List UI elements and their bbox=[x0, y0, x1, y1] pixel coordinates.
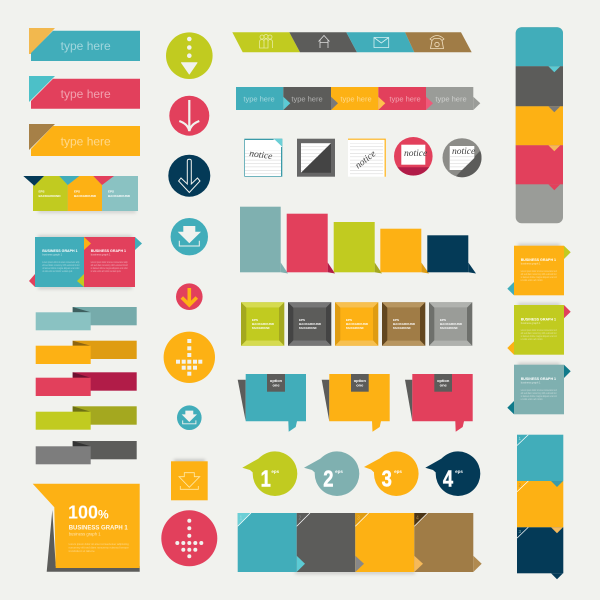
card text bbox=[521, 318, 557, 341]
panel: green business card bbox=[507, 303, 571, 355]
notice orange note: notice bbox=[354, 149, 378, 171]
bubble 1: 1 bbox=[261, 467, 271, 492]
card text: business graph 1 bbox=[521, 380, 541, 384]
notice gray circle bbox=[442, 138, 482, 177]
speech teal: one bbox=[272, 382, 280, 388]
bevel brown bbox=[382, 302, 425, 346]
bevel light gray: BACKGROUND bbox=[440, 322, 463, 326]
step 4 brown bbox=[414, 513, 482, 572]
notice dark note bbox=[297, 139, 335, 177]
card text: BUSINESS GRAPH 1 bbox=[42, 249, 78, 253]
bevel brown: BACKGROUND bbox=[393, 322, 416, 326]
card text: ut wisi enim ad minim bbox=[521, 398, 543, 401]
step 3 orange: 3 bbox=[357, 516, 360, 522]
card text: Lorem ipsum dolor sit amet consectetur adip bbox=[91, 261, 128, 264]
bevel green: BACKGROUND bbox=[252, 322, 275, 326]
callout heading: BUSINESS GRAPH 1 bbox=[69, 526, 128, 532]
bubble 3: eps bbox=[394, 469, 402, 474]
card text: elit sed diam nonummy nibh euismod tinc bbox=[521, 273, 557, 276]
bevel green: BACKGROUND bbox=[252, 327, 270, 330]
bevel gray: EPS bbox=[299, 318, 305, 322]
bar green bbox=[334, 222, 382, 274]
icon: red dotted arrow bbox=[161, 510, 217, 566]
card text: BUSINESS GRAPH 1 bbox=[521, 258, 556, 262]
card text: ut wisi enim ad minim veniam quis bbox=[91, 270, 121, 273]
card text: elit sed diam nonummy nibh euismod tinc bbox=[521, 332, 557, 335]
icon: red circle orange arrow bbox=[176, 283, 203, 310]
speech teal bbox=[238, 374, 306, 432]
icon: small teal download bbox=[177, 405, 202, 430]
ribbon red bbox=[36, 372, 137, 396]
banner red: type here bbox=[61, 87, 111, 101]
step 1 teal bbox=[238, 513, 297, 572]
bevel gray: BACKGROUND bbox=[299, 327, 317, 330]
card text: Lorem ipsum dolor sit amet consectetur adi bbox=[521, 270, 557, 273]
panel: option one speech boxes bbox=[238, 374, 473, 432]
card text: ut wisi enim ad minim bbox=[521, 279, 543, 282]
panel: parallelogram icon strip bbox=[232, 32, 472, 52]
bevel green bbox=[241, 302, 284, 346]
step 2 gray: 2 bbox=[298, 516, 302, 522]
tab labels: EPS bbox=[108, 190, 114, 194]
icon: red branch arrow bbox=[169, 96, 209, 136]
card text: ut wisi enim ad minim veniam quis bbox=[42, 270, 73, 273]
bevel light gray bbox=[429, 302, 472, 346]
tab labels: BACKGROUND bbox=[108, 194, 131, 198]
step 3 orange bbox=[355, 513, 414, 572]
panel: 100% business graph callout bbox=[33, 484, 140, 572]
card text: ut laoreet dolore magna aliquam erat vol bbox=[521, 276, 557, 279]
card text: elit sed diam nonummy nibh euismod tincid bbox=[91, 264, 128, 267]
stack numbers: 1 bbox=[518, 436, 522, 441]
bevel gray bbox=[288, 302, 331, 346]
bubble 2: eps bbox=[335, 469, 343, 474]
card text: Lorem ipsum dolor sit amet consectetur adip bbox=[42, 261, 80, 264]
panel: numbered steps bbox=[238, 513, 482, 574]
speech red: option bbox=[437, 378, 450, 383]
panel: vertical numbered stack bbox=[517, 435, 563, 579]
step labels bbox=[243, 94, 467, 103]
callout body: Lorem ipsum dolor sit amet consectetuer adipiscing bbox=[69, 543, 130, 546]
step 4 brown: 4 bbox=[416, 516, 419, 522]
bevel orange: BACKGROUND bbox=[346, 322, 369, 326]
card text bbox=[521, 377, 557, 401]
notice teal note: notice bbox=[249, 149, 273, 162]
icon: house bbox=[318, 36, 330, 48]
bubble 4: eps bbox=[455, 469, 463, 474]
tab labels: EPS bbox=[74, 190, 80, 194]
bevel light gray: BACKGROUND bbox=[440, 327, 458, 330]
icon: teal download bbox=[171, 218, 208, 255]
tab marker navy bbox=[23, 176, 44, 186]
card text: Lorem ipsum dolor sit amet consectetur adi bbox=[521, 389, 557, 392]
tab labels bbox=[38, 190, 131, 198]
card text: business graph 1 bbox=[42, 252, 63, 256]
icon: green dots arrow bbox=[166, 32, 213, 79]
step labels: type here bbox=[389, 94, 421, 103]
step labels: type here bbox=[291, 94, 323, 103]
bubble 2: 2 bbox=[323, 467, 333, 492]
notice red circle: notice bbox=[404, 149, 427, 159]
icon: orange pixel arrow bbox=[164, 332, 215, 383]
bevel brown: BACKGROUND bbox=[393, 327, 411, 330]
bevel orange bbox=[335, 302, 378, 346]
panel: type here banners bbox=[29, 28, 140, 156]
notice orange note bbox=[348, 139, 386, 177]
notice teal note bbox=[244, 139, 282, 177]
panel: folded ribbons bbox=[36, 307, 137, 464]
bar red bbox=[287, 214, 335, 274]
notice gray circle: notice bbox=[452, 147, 475, 157]
icon: people bbox=[260, 34, 272, 48]
stack numbers: 2 bbox=[518, 482, 522, 488]
panel: notice stickers bbox=[244, 137, 482, 177]
card text: BUSINESS GRAPH 1 bbox=[521, 377, 556, 381]
icon: phone bbox=[430, 36, 444, 48]
card text: ut laoreet dolore magna aliquam erat vol bbox=[521, 335, 557, 338]
bevel green: EPS bbox=[252, 318, 258, 322]
speech red bbox=[405, 374, 473, 432]
speech teal: option bbox=[270, 378, 283, 383]
banner teal: type here bbox=[61, 39, 111, 53]
bar teal bbox=[240, 207, 288, 274]
stack numbers bbox=[518, 436, 522, 534]
card text bbox=[42, 249, 128, 273]
speech orange: option bbox=[354, 378, 366, 383]
panel: orange business card bbox=[507, 244, 571, 295]
bar chart: descending coloured bars bbox=[240, 207, 476, 274]
bevel brown: EPS bbox=[393, 318, 399, 322]
bevel gray: BACKGROUND bbox=[299, 322, 322, 326]
speech orange bbox=[322, 374, 390, 432]
card text: ut wisi enim ad minim bbox=[521, 338, 543, 341]
stack numbers: 3 bbox=[518, 529, 522, 534]
callout body: nonummy elit sed diam nonummy euismod tempor bbox=[69, 546, 129, 550]
card text: ut laoreet dolore magna aliquam erat vol bbox=[521, 395, 557, 398]
ribbon gray bbox=[36, 441, 137, 464]
bubble 3: 3 bbox=[382, 467, 392, 492]
card text: business graph 1 bbox=[521, 321, 541, 325]
banner orange: type here bbox=[61, 134, 111, 148]
card text: elit sed diam nonummy nibh euismod tincid bbox=[42, 264, 80, 267]
card text bbox=[521, 258, 557, 282]
step 1 teal: 1 bbox=[240, 516, 242, 522]
card text: business graph 1 bbox=[91, 252, 111, 256]
100 percent figure: 100% bbox=[68, 502, 109, 522]
step labels: type here bbox=[435, 94, 467, 103]
bubble 1 bbox=[242, 451, 297, 496]
ribbon teal bbox=[36, 307, 137, 330]
card text: BUSINESS GRAPH 1 bbox=[521, 318, 556, 322]
card text: ut laoreet dolore magna aliquam erat volut bbox=[91, 267, 128, 270]
ribbon green bbox=[36, 406, 137, 430]
tab marker red bbox=[93, 176, 114, 185]
bubble 1: eps bbox=[271, 469, 280, 474]
card text: Lorem ipsum dolor sit amet consectetur adi bbox=[521, 329, 557, 332]
panel: business graph double card bbox=[29, 236, 142, 289]
panel: three tab EPS background bbox=[23, 176, 138, 213]
tab labels: BACKGROUND bbox=[74, 194, 97, 198]
icon: mail bbox=[374, 38, 389, 48]
panel: numbered bubbles bbox=[242, 451, 480, 496]
bar navy bbox=[427, 235, 476, 274]
card text: BUSINESS GRAPH 1 bbox=[91, 249, 126, 253]
step 2 gray bbox=[297, 513, 355, 572]
bubble 2 bbox=[304, 451, 359, 496]
tab labels: EPS bbox=[38, 190, 45, 194]
icon: orange square outline download bbox=[171, 460, 208, 500]
callout body bbox=[69, 543, 130, 553]
panel: bevel EPS squares bbox=[241, 302, 472, 346]
tab marker teal bbox=[59, 176, 79, 185]
card text: ut laoreet dolore magna aliquam erat volut bbox=[42, 267, 80, 270]
tab labels: BACKGROUND bbox=[38, 194, 61, 198]
step labels: type here bbox=[340, 94, 372, 103]
callout body: incididunt ut labore bbox=[69, 550, 96, 553]
bar orange bbox=[380, 229, 429, 274]
panel: teal business card bbox=[507, 363, 571, 414]
bubble 3 bbox=[364, 451, 419, 496]
speech red: one bbox=[440, 382, 448, 388]
panel: rounded vertical stack bbox=[516, 27, 563, 223]
bevel orange: BACKGROUND bbox=[346, 327, 364, 330]
notice red circle bbox=[394, 137, 433, 176]
icon: navy outline arrow bbox=[168, 155, 210, 197]
bevel orange: EPS bbox=[346, 318, 352, 322]
bubble 4: 4 bbox=[443, 467, 453, 492]
bevel light gray: EPS bbox=[440, 318, 446, 322]
panel: type here arrow steps bbox=[236, 87, 480, 110]
card text: elit sed diam nonummy nibh euismod tinc bbox=[521, 392, 557, 395]
card text: business graph 1 bbox=[521, 262, 541, 266]
speech orange: one bbox=[356, 382, 364, 388]
bubble 4 bbox=[425, 451, 480, 496]
ribbon orange bbox=[36, 341, 137, 364]
callout subheading: business graph 1 bbox=[69, 532, 101, 536]
step labels: type here bbox=[243, 94, 275, 103]
